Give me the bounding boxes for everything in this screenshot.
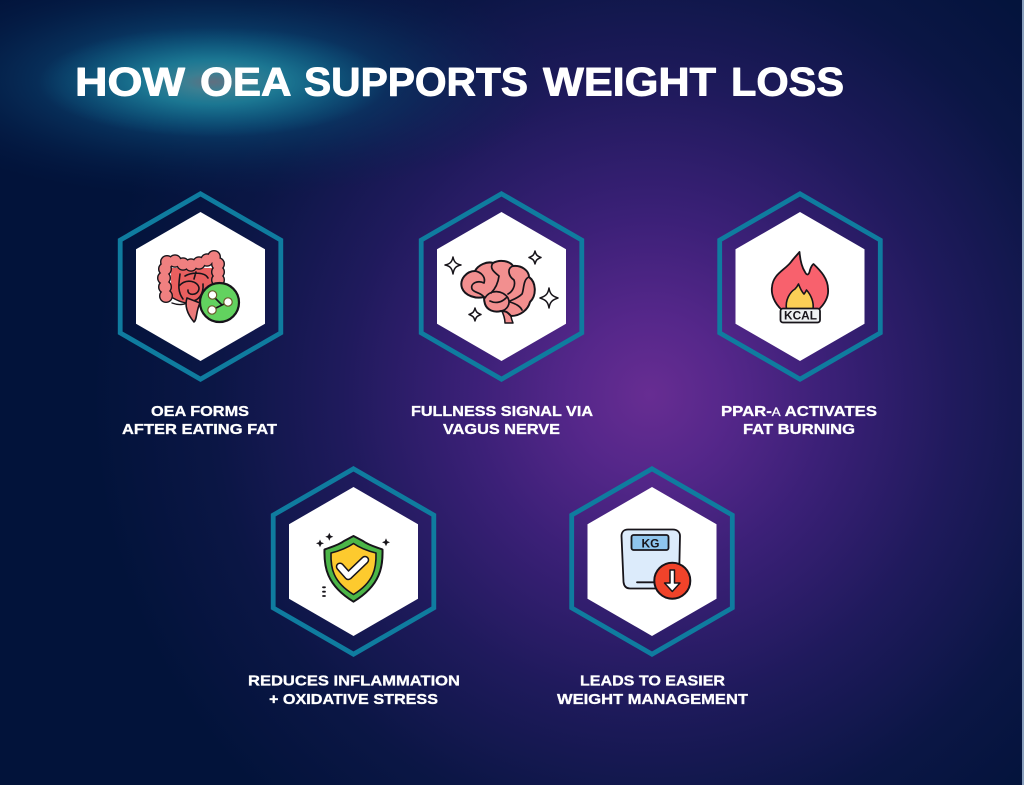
label (557, 674, 748, 708)
panel: OEA forms after eating fat (120, 194, 281, 438)
label (248, 674, 460, 708)
title: SUPPORTS (304, 60, 528, 104)
panel: reduces inflammation and oxidative stress (248, 469, 460, 708)
icon: intestines with molecule (157, 250, 239, 322)
hexagon frame (120, 194, 281, 379)
label: + OXIDATIVE STRESS (269, 692, 438, 708)
label: AFTER EATING FAT (122, 422, 277, 438)
icon: weighing scale with down arrow: KG (642, 536, 660, 550)
page edge strip (1022, 0, 1024, 785)
hexagon frame (720, 194, 880, 379)
icon: brain with sparkles (445, 251, 558, 323)
label: REDUCES INFLAMMATION (248, 674, 460, 690)
panel: PPAR-alpha activates fat burning (720, 194, 880, 438)
label: WEIGHT MANAGEMENT (557, 692, 748, 708)
title: OEA (200, 60, 291, 104)
label: PPAR- A ACTIVATES (721, 404, 877, 420)
title glow (0, 0, 560, 200)
icon: shield with check (316, 533, 390, 602)
title: HOW (75, 60, 185, 104)
label (122, 404, 277, 438)
hexagon frame (572, 469, 732, 654)
panel: leads to easier weight management (557, 469, 748, 708)
label: OEA FORMS (151, 404, 249, 420)
hexagon frame (273, 469, 434, 654)
title: LOSS (731, 60, 844, 104)
icon: flame with KCAL tag: KCAL (784, 310, 817, 322)
label: LEADS TO EASIER (580, 674, 726, 690)
icon: weighing scale with down arrow (622, 530, 690, 599)
label: FULLNESS SIGNAL VIA (411, 404, 594, 420)
label (721, 404, 877, 438)
label (411, 404, 594, 438)
icon: flame with KCAL tag (772, 252, 828, 322)
hexagon frame (421, 194, 582, 379)
title: WEIGHT (543, 60, 716, 104)
label: VAGUS NERVE (443, 422, 560, 438)
label: FAT BURNING (743, 422, 855, 438)
panel: fullness signal via vagus nerve (411, 194, 594, 438)
